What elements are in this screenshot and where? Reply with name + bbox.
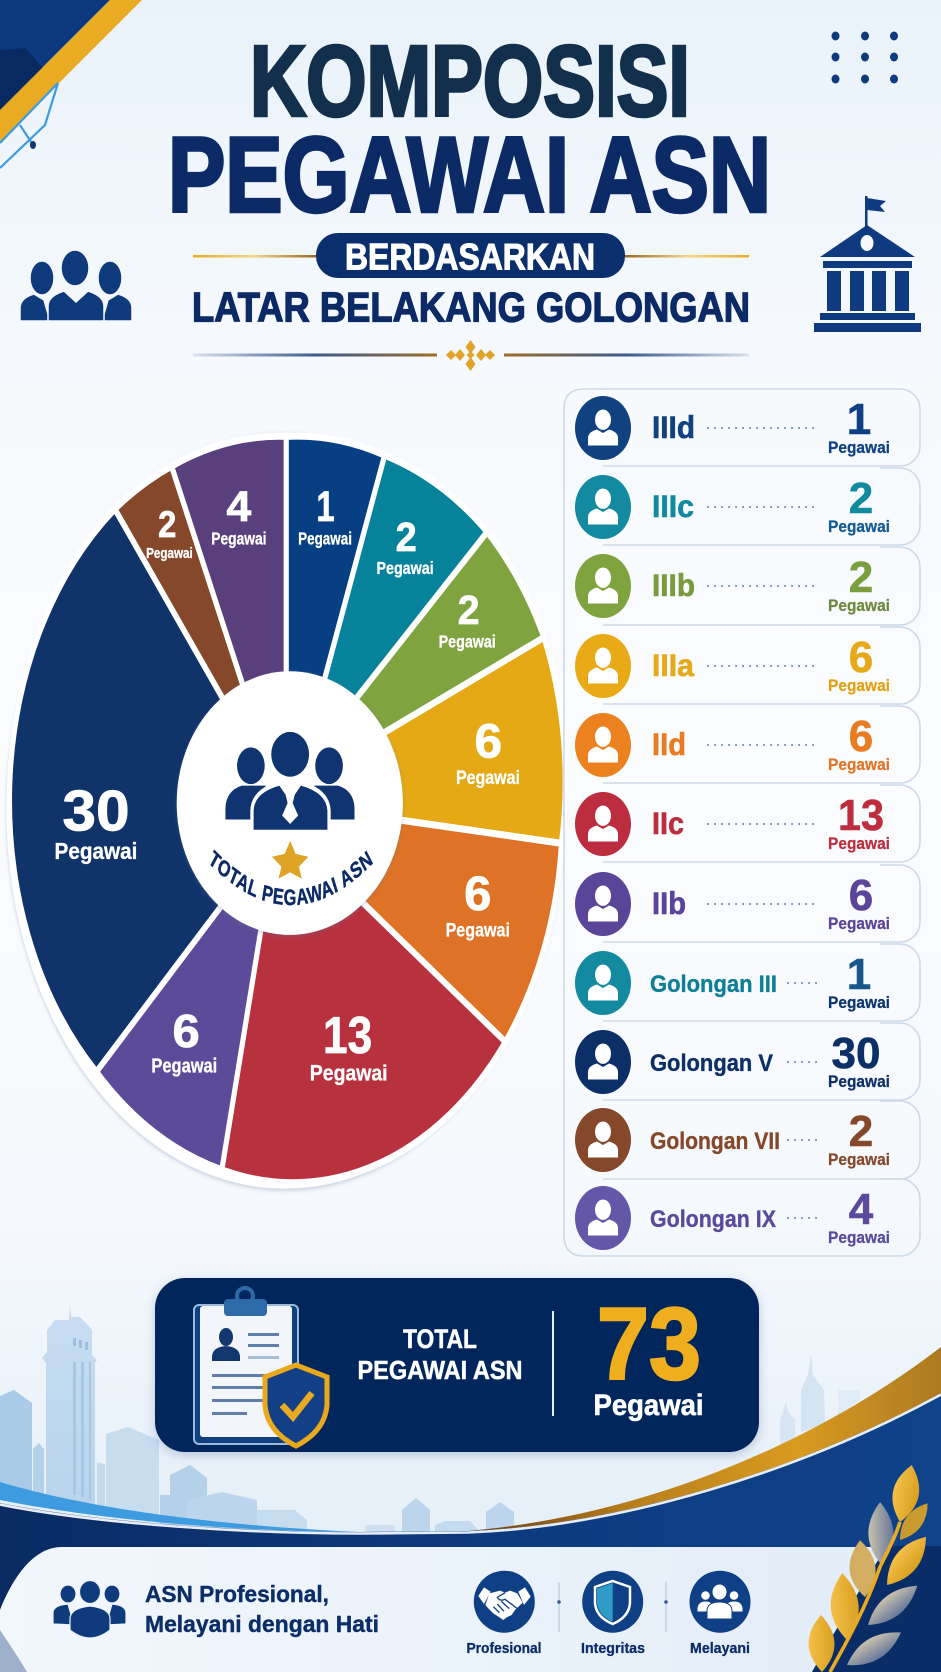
legend row: Golongan III: Pegawai: [828, 994, 890, 1012]
legend row: Golongan III: Golongan III: [650, 971, 777, 998]
total summary panel: [155, 1278, 759, 1452]
legend row: IIId: 1: [847, 395, 871, 444]
legend row: Golongan IX: Golongan IX: [650, 1206, 777, 1233]
total label: [358, 1324, 522, 1385]
icon: government building: [814, 196, 921, 332]
slice: IIId: [286, 436, 385, 803]
pie labels: Pegawai: [151, 1054, 217, 1077]
slice: Golongan IX: [172, 436, 290, 803]
pie labels: Pegawai: [377, 559, 434, 579]
legend row: IIIa: Pegawai: [828, 677, 890, 695]
legend row: IIIc: IIIc: [652, 488, 694, 524]
legend row: IIId: [575, 389, 920, 466]
bottom wave: navy band: [0, 1393, 941, 1672]
ornament divider: [193, 340, 749, 371]
slice: IIIa: [290, 637, 565, 843]
icon: clipboard with shield: [194, 1288, 327, 1446]
panel divider: [552, 1311, 554, 1416]
footer tagline: Melayani dengan Hati: [145, 1611, 379, 1637]
value: integritas: [581, 1571, 645, 1657]
legend row: Golongan IX: 4: [849, 1185, 874, 1234]
legend row: IIId: IIId: [652, 409, 695, 445]
legend row: Golongan V: Golongan V: [650, 1050, 774, 1077]
legend row: Golongan VII: Golongan VII: [650, 1128, 780, 1155]
pie labels: 30: [62, 778, 130, 843]
legend row: IIb: Pegawai: [828, 915, 890, 933]
title: KOMPOSISI: [250, 26, 690, 138]
dot grid decoration: [832, 32, 898, 84]
pie labels: Pegawai: [146, 544, 193, 561]
top-left corner decoration: [0, 0, 142, 168]
pie labels: Pegawai: [310, 1062, 388, 1086]
footer corner shade: [0, 1630, 27, 1672]
legend row: Golongan VII: 2: [849, 1107, 873, 1156]
value: melayani: [690, 1571, 750, 1657]
icon: people group: [20, 250, 132, 321]
legend row: IId: [575, 706, 920, 783]
pie labels: Pegawai: [298, 530, 352, 549]
legend row: IIIb: 2: [849, 553, 873, 602]
total number: 73: [597, 1287, 701, 1401]
legend row: IIIa: IIIa: [652, 647, 694, 683]
legend frame line: [564, 389, 603, 1256]
icon: footer people: [53, 1580, 126, 1638]
value: profesional: [466, 1571, 542, 1657]
legend row: Golongan VII: [575, 1101, 920, 1179]
total label: TOTAL: [403, 1324, 477, 1354]
legend row: IIIa: 6: [849, 633, 873, 682]
slice: IIc: [222, 803, 505, 1183]
icon: center people: [225, 732, 355, 832]
subtitle pill: berdasarkan: BERDASARKAN: [345, 236, 595, 278]
legend row: Golongan V: [575, 1023, 920, 1100]
icon: handshake: [478, 1587, 531, 1620]
footer panel: [0, 1547, 886, 1672]
pie labels: 2: [158, 503, 176, 545]
legend list: [564, 389, 920, 1256]
pie chart: [4, 432, 563, 1192]
pie labels: [55, 482, 520, 1086]
legend row: IIc: Pegawai: [828, 835, 890, 853]
title: PEGAWAI ASN: [168, 114, 771, 234]
legend row: Golongan V: 30: [832, 1029, 880, 1078]
slice: IIIb: [290, 532, 544, 803]
total unit: Pegawai: [594, 1389, 704, 1422]
slice: Golongan V: [9, 509, 290, 1072]
pie labels: Pegawai: [211, 530, 267, 549]
bottom wave: gold ribbon: [468, 1347, 941, 1531]
city skyline background: [0, 1303, 860, 1535]
legend row: Golongan IX: Pegawai: [828, 1229, 890, 1247]
legend row: IIb: 6: [849, 871, 873, 920]
legend row: IIIa: [575, 627, 920, 704]
footer tagline: [145, 1581, 379, 1637]
legend row: IId: Pegawai: [828, 756, 890, 774]
title: [168, 26, 771, 234]
legend row: IIc: IIc: [652, 805, 684, 841]
pie labels: 13: [323, 1006, 372, 1064]
legend row: IIb: [575, 865, 920, 942]
pie labels: 1: [316, 482, 335, 530]
subtitle: latar belakang golongan: LATAR BELAKANG GOLONGAN: [192, 284, 750, 330]
legend row: IIIb: [575, 547, 920, 625]
value: integritas: Integritas: [581, 1640, 645, 1657]
legend row: IIc: 13: [838, 791, 884, 840]
bottom wave: white edge: [0, 1394, 941, 1534]
pie white rim: [7, 432, 564, 1189]
value divider: [557, 1582, 668, 1632]
pie labels: 6: [173, 1005, 200, 1057]
legend row: Golongan V: Pegawai: [828, 1073, 890, 1091]
slice: IId: [290, 803, 561, 1042]
pie labels: 6: [464, 867, 491, 920]
pie labels: Pegawai: [55, 838, 137, 865]
total label: PEGAWAI ASN: [358, 1355, 522, 1385]
icon: people white: [697, 1584, 743, 1619]
bottom wave: blue swoosh: [0, 1482, 360, 1532]
slice: Golongan VII: [115, 466, 290, 803]
value: profesional: Profesional: [466, 1640, 542, 1657]
legend row: IIIc: Pegawai: [828, 518, 890, 536]
subtitle pill: berdasarkan: [193, 233, 749, 278]
slice: IIb: [96, 803, 290, 1170]
pie labels: Pegawai: [439, 633, 496, 652]
pie labels: 6: [474, 714, 502, 768]
legend row: IIIb: Pegawai: [828, 597, 890, 615]
legend row: Golongan III: 1: [847, 950, 871, 999]
legend row: IIIb: IIIb: [652, 567, 695, 603]
pie labels: 2: [458, 587, 480, 633]
pie labels: 4: [227, 482, 251, 530]
legend row: IId: IId: [652, 726, 686, 762]
footer tagline: ASN Profesional,: [145, 1581, 329, 1607]
legend row: IIIc: [575, 468, 920, 545]
center curved label: TOTAL PEGAWAI ASN: [210, 850, 373, 906]
legend row: Golongan III: [575, 944, 920, 1021]
pie labels: Pegawai: [456, 767, 520, 789]
legend row: Golongan VII: Pegawai: [828, 1151, 890, 1169]
icon: shield: [595, 1581, 630, 1624]
legend row: IIc: [575, 785, 920, 862]
pie center disc: [177, 671, 403, 935]
pie labels: Pegawai: [446, 919, 510, 941]
legend row: Golongan IX: [575, 1179, 920, 1256]
legend row: IIId: Pegawai: [828, 439, 890, 457]
value: melayani: Melayani: [690, 1640, 750, 1657]
legend row: IIIc: 2: [849, 474, 873, 523]
dark band lower right: [812, 1546, 941, 1672]
legend row: IIb: IIb: [652, 885, 686, 921]
slice: IIIc: [290, 455, 487, 803]
pie labels: 2: [396, 514, 417, 560]
legend row: IId: 6: [849, 712, 873, 761]
icon: star: [272, 841, 308, 879]
laurel branch: [808, 1463, 935, 1672]
